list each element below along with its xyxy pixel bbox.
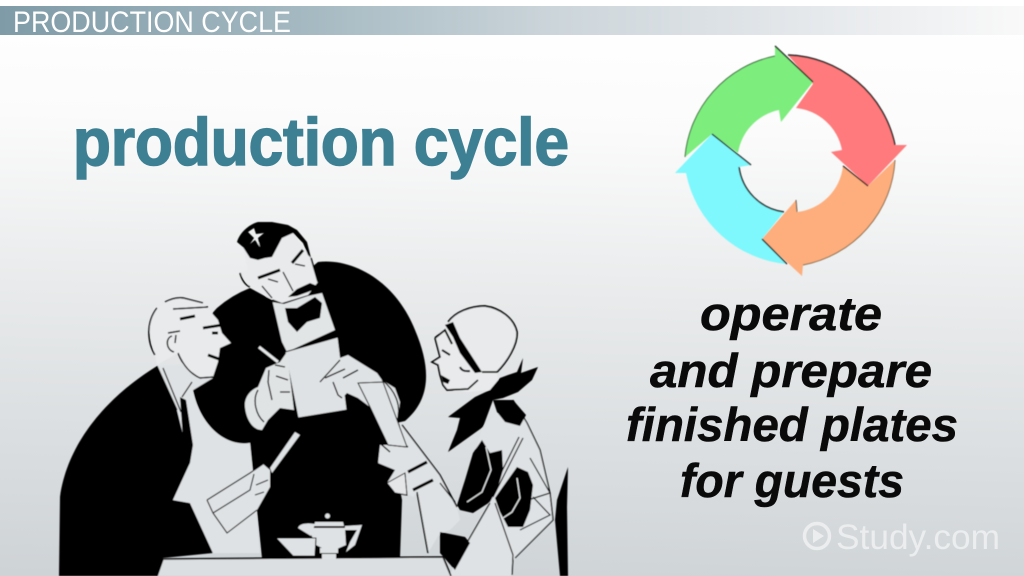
caption line 1: operate (700, 287, 882, 340)
logo text: Study.com (836, 518, 1000, 557)
man collar line (157, 366, 192, 412)
man ear (167, 331, 180, 352)
waiter shirt and bow tie (272, 293, 335, 352)
study.com logo (804, 518, 1000, 557)
arrow: cyan (675, 134, 787, 264)
man head (149, 298, 231, 378)
header band (0, 6, 1024, 39)
chair (555, 467, 568, 576)
woman scarf (448, 358, 538, 452)
caption line 4: for guests (680, 454, 904, 507)
caption line 2: and prepare (650, 344, 932, 397)
waiter hair (237, 222, 311, 260)
man hand and cuff (207, 464, 270, 533)
woman eye and lips (435, 330, 470, 371)
arrow: green (685, 46, 813, 157)
waiter moustache (288, 283, 320, 297)
caption line 3: finished plates (626, 398, 958, 451)
icon: play circle (804, 524, 830, 548)
waiter body (193, 262, 426, 558)
waiter head (237, 222, 320, 303)
cycle diagram (675, 46, 907, 276)
header text: PRODUCTION CYCLE (13, 6, 291, 39)
woman lower black detail (440, 532, 470, 570)
note pad (285, 337, 347, 418)
woman menu (358, 382, 407, 447)
menu (270, 432, 300, 473)
waiter left hand and cuff (245, 347, 294, 430)
man shirt (157, 365, 260, 553)
arrow edge lines (685, 46, 895, 265)
woman dress (440, 400, 553, 576)
hat band (445, 322, 482, 373)
caption (626, 287, 958, 507)
title: production cycle (73, 105, 569, 180)
man brows and mouth (180, 316, 222, 359)
table (157, 557, 451, 576)
pen (259, 347, 278, 362)
illustration: diners and waiter (59, 222, 568, 576)
man jacket (59, 366, 213, 576)
waiter brows and eyes (258, 250, 303, 278)
woman arm and hand (358, 425, 460, 553)
arrow: orange (762, 160, 895, 276)
arrow: red (788, 55, 907, 186)
man tie (180, 397, 193, 480)
teacup (276, 538, 316, 556)
cuff bow (387, 473, 407, 495)
waiter right hand and cuff (320, 355, 400, 440)
woman head and hat (432, 306, 517, 392)
teapot (298, 514, 362, 559)
